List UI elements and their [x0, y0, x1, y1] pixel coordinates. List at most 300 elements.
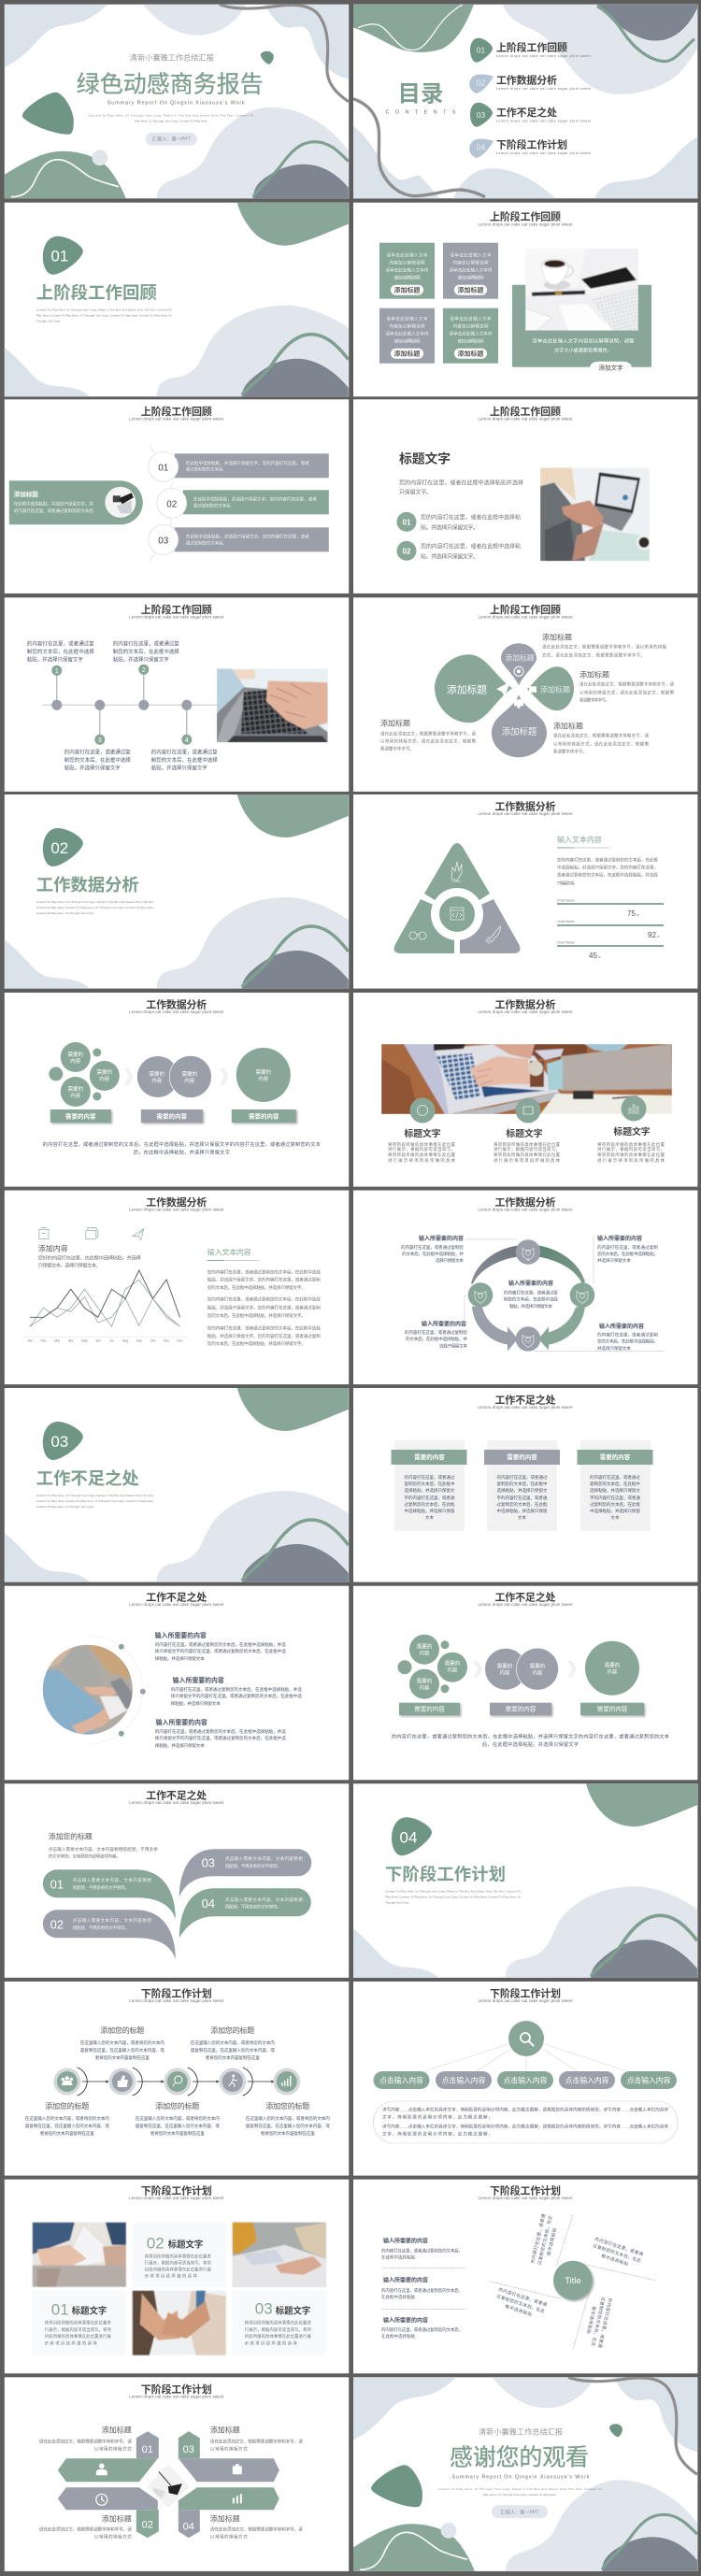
slide subtitle: Lemon drops oat cake oat cake sugar plum sweet	[479, 811, 573, 816]
label top left: 以常用的排版方式	[94, 2445, 132, 2452]
rotated text 2: 的内容打在这里，或者通	[594, 2236, 644, 2257]
column 3: 标题文字	[613, 1125, 651, 1138]
overlapping circles: 需要的	[150, 1070, 165, 1078]
closing description	[437, 2487, 602, 2497]
progress bar 3: %	[598, 955, 601, 959]
label box 2: 需要的内容	[506, 1705, 536, 1713]
slide: three ribbon columns	[353, 1388, 697, 1582]
timeline text 1: 制您的文本后，在此框中选择	[27, 648, 94, 655]
item 1: 择粘贴，并选择只保留文本	[155, 1655, 205, 1662]
leaf 01	[43, 1869, 176, 1919]
bullet 02: 贴，并选择只保留文字。	[421, 552, 479, 560]
timeline text 2: 的内容打在这里，或者通过复	[113, 639, 179, 647]
reporter pill	[146, 133, 197, 146]
large circle: 内容	[258, 1075, 269, 1082]
label top left: 输入所需要的内容	[419, 1235, 464, 1242]
column 2: 需要的内容	[507, 1453, 537, 1461]
heading underline	[557, 847, 609, 849]
column 2	[484, 1440, 560, 1531]
panel 03: 目段所做的具体事情在此位置进行展	[245, 2333, 312, 2340]
closing background blobs	[353, 2377, 697, 2571]
timeline axis and nodes: 3	[98, 737, 102, 744]
slide title: 工作数据分析	[495, 800, 555, 813]
timeline text 2: 制您的文本后，在此框中选择	[113, 648, 179, 655]
slide title: 工作数据分析	[146, 1195, 207, 1209]
left item 3: 的内容打在这里，或者通过复制您的文本后，	[381, 2326, 463, 2333]
column 2: 选择粘贴，并选择只保留文	[497, 1487, 548, 1494]
large circle	[236, 1048, 291, 1102]
card 3: 请单击此处输入文本内	[385, 331, 429, 337]
overlapping circles	[485, 1648, 559, 1690]
node 3: magnifier	[164, 2068, 197, 2096]
contents item 3: 工作不足之处	[496, 106, 557, 119]
label box 1: 需要的内容	[65, 1112, 96, 1120]
slide: section 03	[5, 1388, 349, 1582]
leaf 04: 04	[202, 1896, 215, 1911]
heading block top 1: 者将您的文本内容复制在这里	[95, 2054, 150, 2061]
section title: 工作不足之处	[36, 1468, 139, 1488]
column 1	[388, 1097, 456, 1164]
body text blocks	[207, 1269, 321, 1347]
leaf 03: 搭配感，不用多余的文字修饰。	[225, 1863, 281, 1869]
overlapping circles: 需要的	[497, 1663, 513, 1670]
leader lines	[465, 1238, 664, 1352]
section description: Content To Play Here, Or Through Your Copy, Paste In The Box And Select Only The Text. Content To	[385, 1889, 521, 1893]
body text: 或者通过复制您的文本后，在此框中选择粘贴，并选择	[557, 871, 658, 879]
icon: briefcase	[233, 2464, 242, 2474]
panel 03: 将项目段所做的具体事情在此位置进	[245, 2320, 312, 2326]
rotated text 1: 过复制您的文本后，在此	[536, 2214, 554, 2266]
section background	[5, 203, 349, 397]
bullet 01	[396, 512, 521, 532]
label box 3: 需要的内容	[597, 1705, 628, 1713]
chart description: 只保留文本，选择只保留文本。	[38, 1262, 101, 1269]
progress bar 2	[557, 920, 664, 939]
timeline text 1	[27, 639, 94, 663]
card 3: 添加标题	[394, 350, 421, 358]
bubble group: 内容	[419, 1684, 430, 1692]
bar 3: 通过复制您的文本后	[186, 539, 223, 546]
slide title: 下阶段工作计划	[490, 2184, 561, 2197]
bubble group: 需要的	[68, 1051, 84, 1058]
heading block bottom 1: 添加您的标题	[45, 2101, 89, 2111]
left panel: 在此框中选择粘贴，并选择只保留文字。您	[14, 500, 93, 507]
panel 02: 目段所做的具体事情在此位置进行展	[145, 2267, 212, 2273]
bar 3: 在此框中选择粘贴，并选择只保留文字。您的内容打在这里，或者	[186, 533, 309, 539]
slide title: 上阶段工作回顾	[141, 603, 212, 616]
column 2: 标题文字	[506, 1127, 543, 1139]
body text	[557, 856, 658, 886]
overlapping circles: 内容	[499, 1669, 510, 1677]
intro heading: 添加您的标题	[49, 1831, 93, 1840]
description	[43, 1140, 321, 1155]
description: 的内容打在这里，或者通过复制您的文本后，在此框中选择粘贴，并选择只保留文字的内容打在这里，或者通过复制您的文本	[392, 1733, 669, 1740]
card 4: 请单击此处输入文本	[451, 316, 492, 322]
heading block top 2: 容复制在这里。在这里输入您的文本内容，或	[191, 2047, 275, 2054]
contents item 1: 01	[477, 46, 485, 55]
heading block bottom 3: 添加您的标题	[265, 2101, 309, 2111]
large circle: 需要的	[605, 1662, 621, 1669]
cover background blobs	[5, 5, 349, 199]
reporter pill: 汇报人：第一PPT	[500, 2508, 539, 2515]
center diamond photo	[147, 2464, 190, 2508]
card 4: 请单击此处输入文本内	[449, 331, 493, 337]
label top right: 的内容打在这里，或者通过复制	[597, 1244, 658, 1251]
faint arc with dots	[88, 1636, 146, 1744]
label bottom left: 添加标题	[102, 2513, 132, 2523]
bar 1: 在此框中选择粘贴，并选择只保留文字。您的内容打在这里，或者	[186, 460, 309, 466]
heading block bottom 3	[246, 2101, 330, 2137]
icon: paper plane	[133, 1228, 144, 1239]
panel 01: 示将项目段所做的具体	[45, 2340, 98, 2347]
heading block top 2: 者将您的文本内容复制在这里	[206, 2054, 260, 2061]
column 2	[494, 1097, 561, 1164]
heading block top 2: 在这里输入您的文本内容，或者将您的文本内	[191, 2039, 275, 2046]
item 1: 输入所需要的内容	[155, 1631, 207, 1639]
label right: 请在此处添加正文，根据需要调整字体和字号，请	[579, 680, 675, 687]
slide: title text with laptop photo	[353, 399, 697, 594]
column 1: 中选择粘贴，并选择只保留	[404, 1508, 455, 1514]
card 2: 请单击此处输入文本内	[449, 267, 493, 274]
arm bottom left: 02	[142, 2519, 153, 2530]
leaf 03: 03	[202, 1855, 215, 1869]
bubble group: 需要的	[445, 1660, 461, 1667]
progress bar 2: %	[657, 935, 660, 938]
detail box: 详写内容……点击输入本栏的具体文字，简明扼要的说明分项内容，此为概念图解，请根据您的具体内容酌情修改。详写内容……点击输入本栏的具体	[382, 2124, 669, 2129]
label bottom right: 输入所需要的内容	[599, 1323, 644, 1330]
column 1: 标题文字	[404, 1127, 441, 1139]
center title circle	[553, 2261, 593, 2300]
label bottom left: 的内容打在这里，或者通过复制您	[405, 1329, 467, 1336]
slide: bubble process repeat	[353, 1586, 697, 1780]
photo: person at laptop	[42, 1642, 136, 1736]
item 2: 输入所需要的内容	[173, 1676, 224, 1684]
column 2: 进行展示，根据内容可适当简写。	[494, 1146, 560, 1152]
overlapping circles: 内容	[532, 1669, 543, 1677]
label box 3	[232, 1109, 296, 1123]
column 1: 进行展示将项目段所做的具体	[388, 1157, 456, 1164]
leaf 03: 点击输入需要文本内容，文本内容要相	[225, 1855, 303, 1862]
closing title: 感谢您的观看	[450, 2444, 589, 2470]
left item 2: 的内容打在这里，或者通过复制您的文本后，	[381, 2287, 463, 2294]
item 3: 择只保留文字的内容打在这里，或者通过复制您的文本后，在此框中选	[155, 1735, 286, 1741]
column 3: 复制您的文本后，在此框中	[590, 1481, 640, 1487]
right petal: 添加标题	[540, 684, 570, 694]
line chart: Feb	[40, 1338, 47, 1342]
node 1: people	[53, 2068, 87, 2096]
column 3: 将项目段所做的具体事情在此位置	[597, 1152, 665, 1158]
arm bottom right	[179, 2487, 279, 2538]
detail box: 文字，简明扼要的说明分项内容，此为概念图解，	[382, 2114, 493, 2120]
item 3: 输入所需要的内容	[156, 1718, 207, 1726]
left item 1: 的内容打在这里，或者通过复制您的文本后，	[381, 2248, 463, 2254]
cover description	[89, 114, 253, 123]
photo: coffee and keyboard	[525, 249, 638, 331]
icon: bars	[233, 2494, 242, 2503]
description	[392, 1733, 669, 1748]
intro text	[399, 479, 523, 495]
panel 01: 标题文字	[72, 2306, 107, 2316]
leaf 02: 02	[50, 1917, 64, 1931]
closing subtitle: Summary Report On Qingxin Xiaosuya's Work	[452, 2474, 590, 2480]
label box 1	[50, 1109, 111, 1123]
bullet 01: 01	[403, 518, 411, 526]
slide: circular photo with text list	[5, 1586, 349, 1780]
bubble group	[49, 1042, 120, 1107]
top petal	[501, 643, 536, 685]
icon: owl left	[475, 1292, 486, 1303]
rotated text 3	[494, 2286, 548, 2322]
left panel: 的内容打在这里，或者通过复制您的文本后	[14, 508, 93, 514]
rotated text 2: 框中选择粘贴	[600, 2253, 629, 2268]
label top right: 添加标题	[210, 2425, 240, 2434]
bar 3	[175, 527, 329, 551]
label bottom right: 您的文本后，在此框中选择粘贴，	[597, 1338, 658, 1344]
card 1: 请单击此处输入文本	[387, 252, 428, 259]
body text: 中选择粘贴，并选择只保留文字。您的内容打在这里，	[557, 864, 658, 871]
timeline text 3: 粘贴，并选择只保留文字	[64, 764, 121, 771]
slide title: 工作数据分析	[146, 998, 207, 1011]
label top right: 您的文本后，在此框中选择粘贴，	[597, 1251, 658, 1257]
overlapping circles: 需要的	[530, 1663, 546, 1670]
body text blocks: 您的文本后，在此框中选择粘贴，并选择只保留文字。	[207, 1340, 306, 1347]
timeline text 4: 制您的文本后，在此框中选择	[151, 756, 218, 764]
body text blocks: 粘贴，并选择只保留文字。您的内容打在这里，或者通过复制	[207, 1333, 321, 1339]
column 3: 进行展示，根据内容可适当简写。	[597, 1146, 665, 1152]
card 3: 内容加以解释说明	[389, 323, 425, 330]
arm bottom right: 04	[183, 2521, 194, 2532]
section description: Content To Play Here, Or Through Your Copy, Paste In The Box And Select Only The Text. Content To	[36, 308, 172, 312]
label bottom left: 以常用的排版方式	[94, 2533, 132, 2540]
slide: leaf list	[5, 1783, 349, 1978]
icon: owl bottom	[522, 1335, 534, 1348]
slide subtitle: Lemon drops oat cake oat cake sugar plum sweet	[479, 1998, 573, 2003]
column 1: 进行展示，根据内容可适当简写。	[388, 1146, 455, 1152]
card 3: 请单击此处输入文本	[387, 316, 428, 322]
card 4: 内容加以解释说明	[452, 323, 489, 330]
closing kicker: 清新小囊雅工作总结汇报	[479, 2426, 563, 2436]
timeline text 1: 粘贴，并选择只保留文字	[27, 655, 83, 663]
card 2	[443, 243, 498, 299]
heading block bottom 1: 者将您的文本内容复制在这里	[40, 2130, 94, 2137]
slide subtitle: Lemon drops oat cake oat cake sugar plum sweet	[479, 1208, 573, 1211]
slide title: 上阶段工作回顾	[141, 405, 212, 418]
label center: 的内容打在这里，或者通过复	[504, 1290, 558, 1295]
slide title: 工作数据分析	[495, 998, 555, 1011]
heading block top 1: 在这里输入您的文本内容，或者将您的文本内	[80, 2039, 165, 2046]
bullet 01: 贴，并选择只保留文字。	[421, 523, 479, 531]
intro text: 只保留文字。	[399, 488, 432, 495]
arm bottom left	[58, 2487, 159, 2538]
connector arrows	[82, 2081, 274, 2082]
bubble group: 需要的	[417, 1678, 433, 1685]
line chart: Aug	[122, 1338, 128, 1342]
section description	[385, 1889, 521, 1904]
body text blocks: 粘贴，并选择只保留文字。您的内容打在这里，或者通过复制	[207, 1277, 321, 1282]
label bottom right: 并选择只保留文本	[597, 1345, 631, 1352]
progress bar 1: %	[637, 913, 639, 917]
slide: section 02	[5, 794, 349, 989]
progress bar 3: Chart Name	[557, 940, 575, 944]
column 1: 文本	[425, 1514, 434, 1521]
left item 3: 输入所需要的内容	[383, 2317, 428, 2325]
rotated text 2: 过复制您的文本后，在此	[592, 2242, 642, 2264]
section description: Play Here, Content To Play Here, Or Through Your Copy. Content To Play Here, Content To Play Here, Or	[385, 1895, 521, 1898]
label top	[542, 632, 667, 658]
photo: person using laptop	[540, 467, 651, 561]
item 2: 的内容打在这里，或者通过复制您的文本后，在此框中选择粘贴，并选	[171, 1686, 302, 1693]
slide title: 下阶段工作计划	[141, 2383, 212, 2396]
column 3: 需要的内容	[600, 1453, 631, 1461]
item 2: 择只保留文字的内容打在这里，或者通过复制您的文本后，在此框中选	[171, 1693, 302, 1699]
closing description: Play Here, Or Through Your Copy. Content To Play Here	[483, 2493, 556, 2497]
section title: 工作数据分析	[36, 875, 139, 894]
triangle diagram	[394, 843, 520, 953]
contents item 4: 04	[477, 143, 485, 152]
slide title: 工作数据分析	[495, 1195, 555, 1209]
photo: hands on keyboard	[217, 668, 328, 742]
circular arrow diagram	[468, 1239, 594, 1352]
panel 03: 03	[255, 2300, 273, 2318]
slide: contents	[353, 5, 701, 199]
slide: wide photo with three columns	[353, 993, 697, 1187]
rotated text 3: 的内容打在这里，或者通	[498, 2286, 548, 2308]
line chart	[22, 1270, 187, 1342]
rotated text 4: 的内容打在这里，或者通	[596, 2297, 613, 2349]
section background	[5, 794, 349, 989]
timeline axis and nodes: 4	[185, 737, 189, 744]
cover subtitle: Summary Report On Qingxin Xiaosuya's Work	[107, 101, 245, 107]
label box 3	[580, 1703, 644, 1715]
column 3: 的内容打在这里，或者通过	[590, 1474, 640, 1481]
label bottom left: 添加标题	[380, 718, 410, 727]
label bottom right: 以常用的排版方式，请在此处添加正文，根据需	[553, 740, 650, 747]
progress bar 2: Chart Name	[557, 920, 575, 923]
label top right	[597, 1235, 658, 1264]
contents item 1: 上阶段工作回顾	[496, 41, 567, 54]
panel 02	[133, 2223, 226, 2287]
left petal	[435, 654, 512, 723]
section description: Content To Play Here, Or Through Your Copy.	[36, 1505, 94, 1509]
panel 02: 标题文字	[168, 2240, 203, 2250]
column 1	[391, 1440, 467, 1531]
column 2: 字的内容打在这里，或者通	[497, 1495, 548, 1501]
card 1: 添加标题	[394, 286, 421, 294]
pill 1: 点击输入内容	[379, 2075, 423, 2084]
column 2: 将项目段所做的具体事情在此位置	[494, 1152, 561, 1158]
icon: pen hand	[451, 862, 462, 881]
contents item 4: Lemon drops oat cake oat cake sugar plum sweet	[496, 151, 591, 155]
card 1: 内容加以解释说明	[389, 260, 425, 266]
section description: Content To Play Here, Or Through Your Copy.	[36, 911, 94, 915]
contents item 2: 02	[477, 79, 485, 88]
slide: section 01	[5, 203, 349, 397]
slide title: 下阶段工作计划	[490, 1987, 561, 2000]
leaf 02	[43, 1910, 176, 1959]
label top left	[401, 1235, 464, 1264]
icon: person	[96, 2464, 107, 2475]
slide subtitle: Lemon drops oat cake oat cake sugar plum sweet	[479, 2196, 573, 2200]
timeline axis and nodes	[42, 665, 220, 745]
heading block bottom 2: 者将您的文本内容复制在这里	[150, 2130, 205, 2137]
contents sub-heading: CONTENTS	[385, 110, 456, 116]
rotated text 4	[583, 2295, 613, 2349]
panel 01: 目段所做的具体事情在此位置进行展	[45, 2333, 112, 2340]
bubble group	[398, 1635, 467, 1699]
number circle 02	[157, 488, 187, 518]
heading block top 1	[80, 2025, 165, 2061]
label box 2	[141, 1109, 203, 1123]
icon: owl right	[577, 1292, 588, 1303]
label top: 添加标题	[542, 632, 572, 641]
slide title: 下阶段工作计划	[141, 2184, 212, 2197]
slide title: 工作不足之处	[495, 1393, 555, 1406]
item 1: 的内容打在这里，或者通过复制您的文本后，在此框中选择粘贴，并选	[155, 1641, 286, 1648]
center title circle: Title	[565, 2276, 581, 2286]
pill 3: 点击输入内容	[504, 2075, 548, 2084]
column 1: 将项目段所做的具体事情在此位置	[388, 1141, 456, 1148]
slide title: 上阶段工作回顾	[490, 210, 561, 223]
label bottom right	[210, 2513, 303, 2540]
label top left: 添加标题	[102, 2425, 132, 2434]
label top left	[39, 2425, 132, 2452]
heading block bottom 1: 容复制在这里。在这里输入您的文本内容，或	[25, 2123, 109, 2129]
section description	[36, 308, 172, 323]
slide subtitle: Lemon drops oat cake oat cake sugar plum sweet	[479, 416, 573, 421]
photo: team hands	[133, 2291, 226, 2355]
contents item 1: Lemon drops oat cake oat cake sugar plum sweet	[496, 54, 591, 58]
panel 01	[33, 2291, 126, 2355]
section number badge	[43, 828, 83, 866]
section description: Content To Play Here, Content To Play Here, Or Through Your Copy. Content To Play Here,	[36, 1499, 154, 1503]
left item 3: 在此框中选择粘贴	[381, 2333, 416, 2340]
panel 03	[233, 2291, 326, 2355]
leaf 01: 01	[50, 1877, 64, 1891]
card 4	[443, 308, 498, 364]
slide subtitle: Lemon drops oat cake oat cake sugar plum sweet	[129, 614, 224, 619]
timeline text 3: 制您的文本后，在此框中选择	[64, 756, 131, 764]
timeline text 2: 粘贴，并选择只保留文字	[113, 655, 169, 663]
icon: owl top	[522, 1249, 534, 1260]
bottom petal	[492, 694, 547, 757]
large circle: 内容	[607, 1668, 618, 1676]
left petal: 添加标题	[447, 682, 487, 695]
dashed dividers	[382, 2215, 655, 2350]
slide subtitle: Lemon drops oat cake oat cake sugar plum sweet	[479, 1405, 573, 1410]
section number badge	[43, 236, 83, 275]
label top left: 的文本后，在此框中选择粘贴，并	[402, 1251, 464, 1257]
overlapping circles: 需要的	[182, 1070, 198, 1078]
column 2: 的内容打在这里，或者通过	[497, 1474, 548, 1481]
label top right: 并选择只保留文本	[597, 1257, 631, 1264]
section description: Content To Play Here, Content To Play Here, Or Through Your Copy. Content To Play Here,	[36, 906, 154, 909]
leaf 01: 搭配感，不用多余的文字修饰。	[73, 1884, 129, 1891]
line chart: Mar	[54, 1338, 61, 1342]
timeline axis and nodes: 1	[55, 668, 59, 675]
number circle 03	[149, 524, 179, 554]
progress bar 1: 75	[627, 909, 636, 918]
column 2: 复制您的文本后，在此框中	[497, 1481, 548, 1487]
column 3	[597, 1095, 665, 1164]
slide title: 下阶段工作计划	[141, 1987, 212, 2000]
heading block bottom 1: 在这里输入您的文本内容，或者将您的文本内	[25, 2115, 109, 2122]
heading block bottom 2: 容复制在这里。在这里输入您的文本内容，或	[136, 2123, 220, 2129]
label top right	[210, 2425, 303, 2452]
slide: circular arrows	[353, 1191, 697, 1384]
slide subtitle: Lemon drops oat cake oat cake sugar plum sweet	[479, 222, 573, 227]
column 2: 文本	[518, 1514, 526, 1521]
timeline text 2	[113, 639, 179, 663]
